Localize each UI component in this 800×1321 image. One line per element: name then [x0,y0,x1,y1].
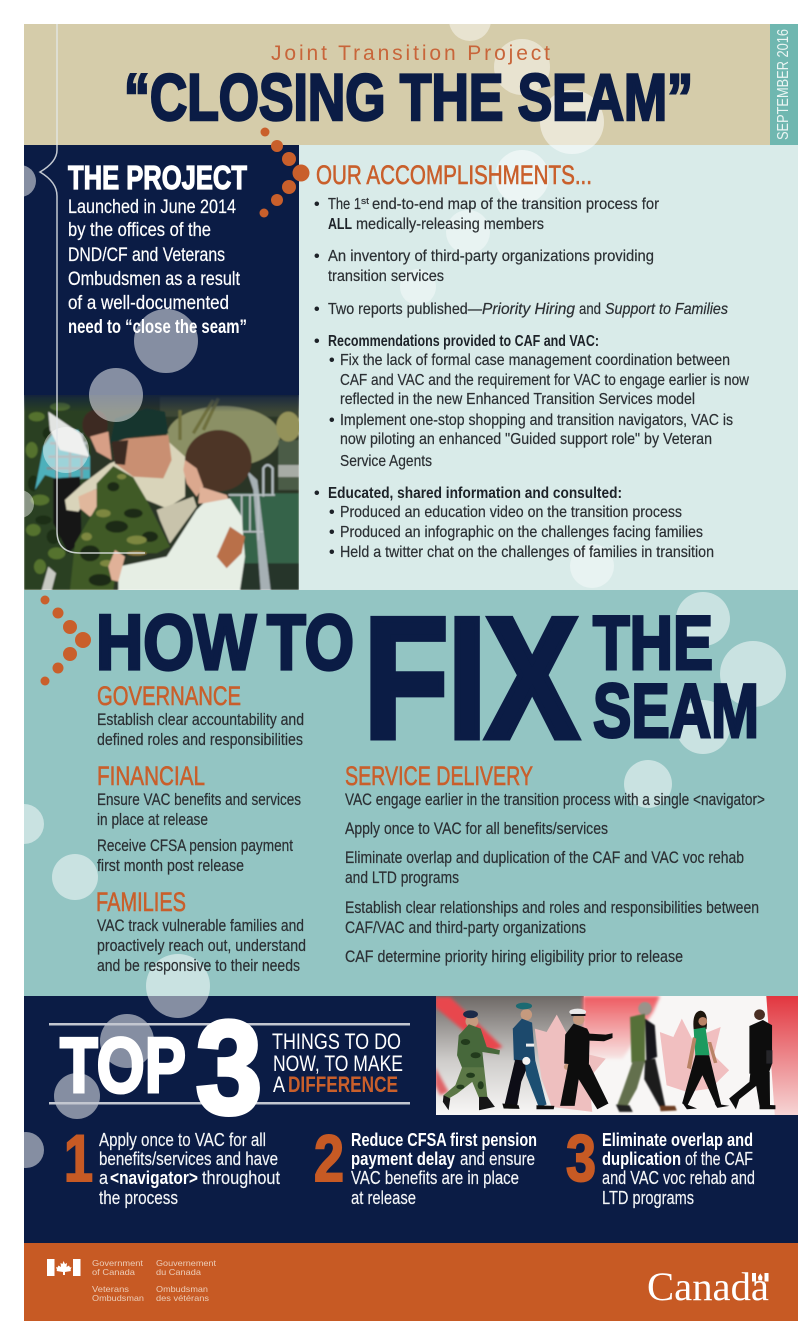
text block: governance [97,681,304,749]
text block: our accomplishments: now piloting an enhanced "Guided support role" by Veteran [340,431,712,448]
text block: the project: by the offices of the [68,220,211,241]
text block: the project: Launched in June 2014 [68,197,236,218]
text block: our accomplishments: and [579,301,601,318]
text block: our accomplishments: end-to-end map of the transition process for [372,196,660,213]
item 1: Apply once to VAC for all [99,1130,266,1150]
logo: Canada wordmark: Canada [647,1264,769,1309]
panel: footer background [24,1243,798,1321]
text block: financial: first month post release [97,857,244,875]
text block: governance: Establish clear accountability and [97,711,304,729]
item 1: a [99,1168,109,1188]
item 1: the process [99,1188,178,1208]
text block: governance: defined roles and responsibilities [97,731,303,749]
item 3: and VAC voc rehab and [602,1168,755,1188]
image: people walking in front of Canadian flag [435,995,800,1116]
text block: our accomplishments [314,160,749,561]
text block: the project: THE PROJECT [68,159,247,196]
text block: the project: DND/CF and Veterans [68,245,225,266]
heading: top 3 things to do: TOP [60,1021,186,1109]
text block: our accomplishments: • [314,301,320,318]
text block: service delivery: CAF determine priority hiring eligibility prior to release [345,948,683,966]
figure: soldier in camouflage [443,1010,500,1110]
subtitle: Joint Transition Project [271,42,550,65]
panel: how to fix the seam background [24,590,798,996]
text block: our accomplishments: • [314,196,320,213]
text block: financial: in place at release [97,811,208,829]
item 2: Reduce CFSA first pension [351,1130,537,1150]
text block: our accomplishments: OUR ACCOMPLISHMENTS... [316,160,592,190]
heading: top 3 things to do: THINGS TO DO [272,1029,401,1054]
bracket line [40,24,145,553]
item 2: at release [351,1188,416,1208]
text block: service delivery: Apply once to VAC for all benefits/services [345,820,608,838]
text block: our accomplishments: • [314,248,320,265]
text block: our accomplishments: Fix the lack of formal case management coordination between [340,352,730,369]
item 1: throughout [202,1168,280,1188]
text block: our accomplishments: Service Agents [340,453,432,470]
figure: woman in green top [682,1011,729,1109]
item 3: Eliminate overlap and [602,1130,753,1150]
text block: service delivery: CAF/VAC and third-party organizations [345,919,586,937]
text block: service delivery: SERVICE DELIVERY [345,761,533,791]
heading: top 3 things to do [49,994,410,1141]
item 2: 2 [314,1121,344,1195]
text block: our accomplishments: • [329,524,335,541]
text block: our accomplishments: Implement one-stop shopping and transition navigators, VAC is [340,412,733,429]
text block: families: FAMILIES [96,887,186,917]
text block: service delivery [345,761,765,966]
item 1: <navigator> [110,1168,198,1188]
photo: soldier hugging his children [24,390,300,590]
item 3: LTD programs [602,1188,694,1208]
item 3: 3 [566,1121,596,1195]
figure: air force officer [502,1003,554,1109]
text block: the project [68,159,247,338]
text block: families: and be responsive to their needs [97,957,300,975]
text block: our accomplishments: Educated, shared information and consulted: [328,485,622,502]
text block: our accomplishments: Held a twitter chat on the challenges of families in transition [340,544,714,561]
item 1 [64,1121,280,1208]
item 2 [314,1121,537,1208]
text block: families: proactively reach out, understand [97,937,306,955]
logo: government of Canada flag signature: of Canada [92,1267,135,1277]
text block: our accomplishments: transition services [328,268,444,285]
logo: government of Canada flag signature: Ombudsman [92,1293,144,1303]
text block: the project: Ombudsmen as a result [68,269,241,290]
panel: top 3 background [24,996,798,1243]
logo: government of Canada flag signature: Gouvernement [156,1258,217,1268]
item 1: 1 [64,1121,93,1195]
heading: top 3 things to do: DIFFERENCE [288,1072,398,1097]
item 3: of the CAF [685,1149,753,1169]
heading: top 3 things to do: 3 [196,994,262,1141]
text block: our accomplishments: st [361,196,370,206]
text block: our accomplishments: reflected in the new Enhanced Transition Services model [340,391,695,408]
heading: how to fix the seam: FIX [364,583,578,774]
text block: financial: Receive CFSA pension payment [97,837,293,855]
text block: our accomplishments: • [329,504,335,521]
panel: the project background [24,145,299,395]
panel: accomplishments background [299,145,798,590]
figure: businessman [729,1009,775,1109]
text block: our accomplishments: Priority Hiring [482,301,575,318]
text block: our accomplishments: • [329,352,335,369]
figure: naval officer [560,1009,613,1109]
text block: our accomplishments: Recommendations provided to CAF and VAC: [328,333,599,350]
logo: government of Canada flag signature: des vétérans [156,1293,209,1303]
heading: how to fix the seam: THE [593,601,713,686]
logo: government of Canada flag signature: du Canada [156,1267,201,1277]
text block: our accomplishments: medically-releasing members [356,216,544,233]
item 3 [566,1121,755,1208]
text block: the project: of a well-documented [68,293,229,314]
heading: how to fix the seam [96,583,759,774]
heading: top 3 things to do: NOW, TO MAKE [273,1051,403,1076]
text block: service delivery: and LTD programs [345,869,459,887]
text block: financial: FINANCIAL [97,761,205,791]
text block: our accomplishments: Support to Families [605,301,728,318]
text block: our accomplishments: • [314,333,320,350]
logo: government of Canada flag signature: Veterans [92,1284,129,1294]
text block: our accomplishments: Produced an education video on the transition process [340,504,682,521]
text block: families: VAC track vulnerable families and [97,917,304,935]
text block: our accomplishments: • [329,412,335,429]
logo: government of Canada flag signature [47,1258,217,1303]
item 1: benefits/services and have [99,1149,278,1169]
text block: the project: need to “close the seam” [68,317,247,338]
text block: our accomplishments: • [314,485,320,502]
text block: our accomplishments: • [329,544,335,561]
logo: government of Canada flag signature: Ombudsman [156,1284,208,1294]
text block: financial: Ensure VAC benefits and services [97,791,301,809]
item 2: VAC benefits are in place [351,1168,519,1188]
dots: middle chevron [40,596,91,686]
dots: top chevron [260,128,310,218]
photo fade into navy [24,388,299,412]
text block: our accomplishments: Two reports published— [328,301,482,318]
item 2: payment delay [351,1149,455,1169]
item 3: duplication [602,1149,681,1169]
text block: our accomplishments: Produced an infographic on the challenges facing families [340,524,703,541]
date tab: September 2016: SEPTEMBER 2016 [775,29,792,140]
heading: how to fix the seam: HOW [96,598,256,686]
text block: our accomplishments: The 1 [328,196,361,213]
date tab: September 2016 [770,24,798,145]
header band [24,24,770,145]
text block: our accomplishments: An inventory of third-party organizations providing [328,248,654,265]
text block: our accomplishments: ALL [328,216,352,233]
text block: governance: GOVERNANCE [97,681,241,711]
text block: financial [97,761,301,875]
item 2: and ensure [460,1149,535,1169]
heading: top 3 things to do: A [273,1072,285,1097]
figure: veteran in motion [616,1002,677,1112]
text block: families [96,887,306,975]
logo: government of Canada flag signature: Government [92,1258,144,1268]
heading: how to fix the seam: TO [267,598,354,686]
